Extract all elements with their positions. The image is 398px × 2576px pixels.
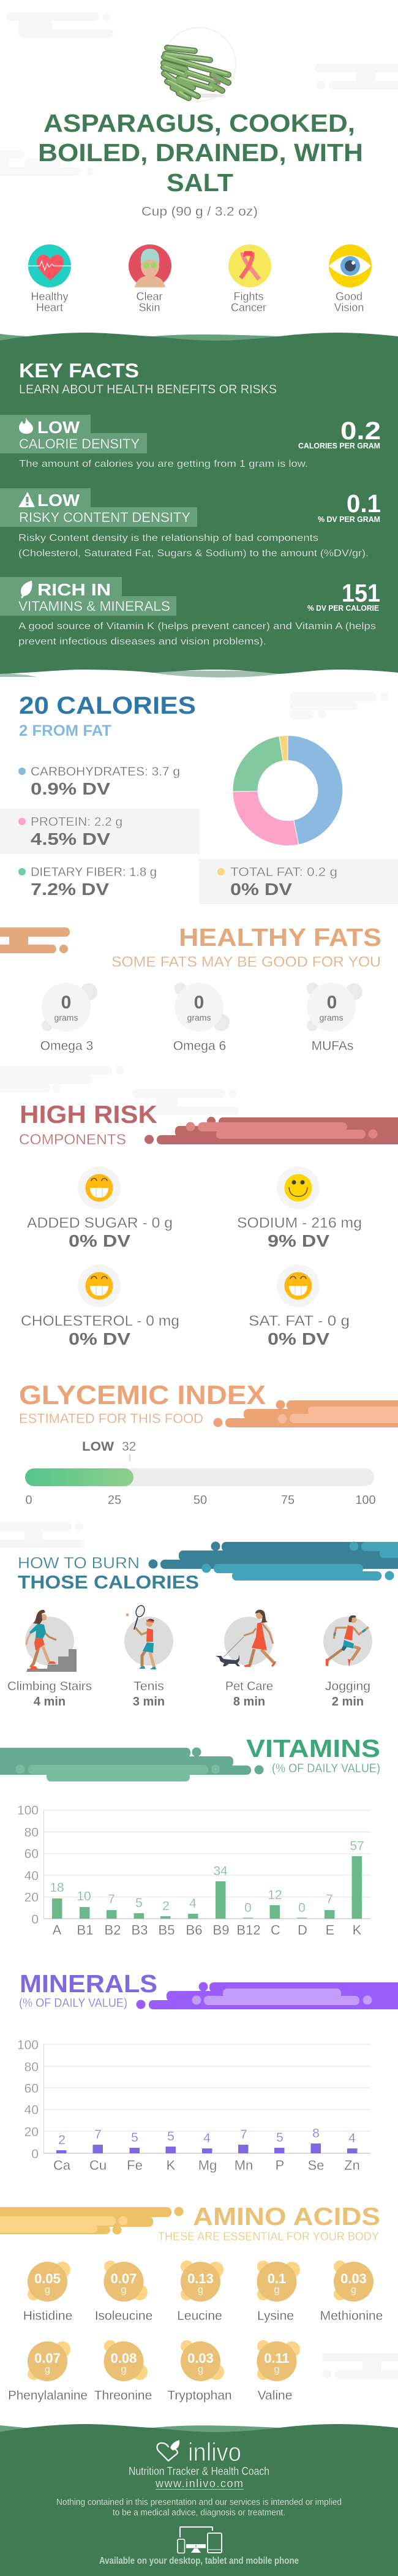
benefit: clear skin: Clear xyxy=(136,290,163,303)
nutrient: total fat: TOTAL FAT: 0.2 g xyxy=(230,866,337,879)
amino acid: methionine: 0.03 xyxy=(340,2271,367,2286)
heading: minerals: (% OF DAILY VALUE) xyxy=(19,1996,127,2010)
fact: rich in vitamins and minerals: 151 xyxy=(342,579,380,607)
amino acid: lysine: 0.1 xyxy=(268,2271,286,2286)
bar chart: minerals: Mg xyxy=(198,2158,217,2173)
bar chart: minerals: 40 xyxy=(24,2103,39,2117)
amino acid: histidine: g xyxy=(45,2284,50,2295)
bar chart: minerals: 5 xyxy=(276,2131,283,2145)
bar chart: minerals: Cu xyxy=(89,2158,107,2173)
nutrient: carbohydrates xyxy=(18,765,180,798)
bar chart: minerals xyxy=(17,2038,370,2173)
fat: omega 3: 0 xyxy=(61,992,71,1013)
bar chart: vitamins: 100 xyxy=(17,1804,39,1818)
disclaimer: to be a medical advice, diagnosis or treatment. xyxy=(113,2507,285,2518)
bar chart: vitamins: B9 xyxy=(213,1922,229,1938)
fat: omega 3: grams xyxy=(54,1013,78,1022)
bar chart: minerals: 20 xyxy=(24,2125,39,2139)
bar chart: vitamins: E xyxy=(326,1922,334,1938)
bar chart: vitamins: 4 xyxy=(189,1897,197,1911)
bar chart: vitamins: B1 xyxy=(77,1922,93,1938)
heading: vitamins xyxy=(246,1734,380,1775)
amino acid: threonine: 0.08 xyxy=(111,2351,137,2366)
fact: risky content density: LOW xyxy=(37,491,80,510)
tagline: Nutrition Tracker & Health Coach xyxy=(129,2465,269,2477)
fact: rich in vitamins and minerals: VITAMINS & MINERALS xyxy=(18,599,170,614)
heading: high risk: COMPONENTS xyxy=(19,1131,126,1148)
bar chart: vitamins: 5 xyxy=(135,1896,143,1910)
fact: risky content density: Risky Content density is the relationship of bad components xyxy=(18,533,318,543)
heading: how to burn those calories: HOW TO BURN xyxy=(18,1554,140,1572)
fact: calorie density: CALORIE DENSITY xyxy=(19,436,140,451)
heading: high risk: HIGH RISK xyxy=(20,1100,157,1128)
bar chart: vitamins: 7 xyxy=(108,1892,115,1906)
amino acid: leucine: g xyxy=(198,2284,203,2295)
panel: key facts xyxy=(0,333,398,678)
bar chart: minerals: 4 xyxy=(348,2131,356,2145)
amino acid: threonine xyxy=(94,2340,152,2403)
heading: how to burn those calories: THOSE CALORIES xyxy=(18,1571,199,1593)
amino acid: threonine: g xyxy=(121,2363,127,2375)
bar chart: minerals: Mn xyxy=(235,2158,253,2173)
decorative cloud: top right xyxy=(315,64,398,89)
amino acid: methionine: g xyxy=(351,2284,356,2295)
bar chart: vitamins: B2 xyxy=(105,1922,121,1938)
activity: pet care: Pet Care xyxy=(225,1680,273,1693)
bar chart: vitamins: D xyxy=(298,1922,307,1938)
glycemic index gauge: 75 xyxy=(281,1494,295,1507)
glycemic index gauge: 50 xyxy=(193,1494,207,1507)
amino acid: isoleucine: Isoleucine xyxy=(95,2309,152,2323)
bar chart: vitamins: 18 xyxy=(50,1881,64,1895)
title xyxy=(38,109,363,197)
bar chart: minerals: Ca xyxy=(53,2158,71,2173)
fat: omega 3 xyxy=(40,983,97,1053)
header graphic: minerals xyxy=(136,1982,398,2009)
bar chart: vitamins: 0 xyxy=(31,1913,39,1927)
benefit: fights cancer xyxy=(228,244,271,314)
bar chart: minerals: 7 xyxy=(240,2128,247,2142)
food photo: asparagus xyxy=(162,28,236,101)
bar chart: vitamins: 80 xyxy=(24,1826,39,1840)
bar chart: vitamins: A xyxy=(53,1922,62,1938)
amino acid: valine: Valine xyxy=(258,2389,292,2403)
bar chart: minerals: 5 xyxy=(131,2131,138,2145)
activity: tennis: Tenis xyxy=(133,1680,164,1693)
benefit: clear skin: Skin xyxy=(138,301,160,314)
serving size: Cup (90 g / 3.2 oz) xyxy=(141,205,258,219)
bar chart: vitamins: 20 xyxy=(24,1890,39,1905)
activity: pet care xyxy=(216,1610,276,1709)
fact: risky content density xyxy=(0,488,381,559)
risk: added sugar: 0% DV xyxy=(69,1231,130,1250)
bar chart: minerals: Se xyxy=(308,2158,324,2173)
amino acid: isoleucine xyxy=(95,2261,152,2323)
bar chart: vitamins: K xyxy=(353,1922,362,1938)
logo: inlivo: inlivo xyxy=(188,2438,241,2466)
heading: glycemic index: ESTIMATED FOR THIS FOOD xyxy=(19,1411,203,1426)
nutrient: protein xyxy=(0,809,200,854)
heading: healthy fats: HEALTHY FATS xyxy=(179,923,381,951)
heading: minerals: MINERALS xyxy=(20,1970,157,1998)
benefit: healthy heart xyxy=(28,244,71,314)
decorative cloud: behind title xyxy=(0,150,94,176)
nutrient: total fat xyxy=(199,859,398,904)
heading: healthy fats: SOME FATS MAY BE GOOD FOR YOU xyxy=(111,954,381,970)
bar chart: vitamins: 2 xyxy=(162,1899,170,1913)
glycemic index gauge: LOW xyxy=(82,1440,114,1454)
amino acid: methionine: Methionine xyxy=(320,2309,383,2323)
benefit: fights cancer: Fights xyxy=(233,290,264,303)
bar chart: minerals: 80 xyxy=(24,2060,39,2074)
decorative cloud: high risk right xyxy=(132,1089,239,1115)
bar chart: vitamins: C xyxy=(271,1922,280,1938)
glycemic index gauge: 32 xyxy=(122,1440,136,1454)
fact: rich in vitamins and minerals xyxy=(0,577,380,647)
bar chart: vitamins: 34 xyxy=(213,1864,228,1878)
amino acid: isoleucine: 0.07 xyxy=(111,2271,137,2286)
heading: minerals xyxy=(19,1970,157,2010)
bar chart: minerals: 7 xyxy=(94,2128,102,2142)
heading: vitamins: VITAMINS xyxy=(246,1734,380,1762)
fat: omega 6 xyxy=(173,983,230,1053)
heading: glycemic index xyxy=(19,1380,266,1426)
panel: footer xyxy=(0,2424,398,2576)
risk: saturated fat: SAT. FAT - 0 g xyxy=(249,1313,350,1329)
fact: rich in vitamins and minerals: % DV PER CALORIE xyxy=(307,604,379,613)
nutrient: dietary fiber: 7.2% DV xyxy=(31,880,109,899)
heading: amino acids xyxy=(158,2202,380,2243)
activity: jogging: 2 min xyxy=(332,1695,364,1709)
bar chart: vitamins: 40 xyxy=(24,1869,39,1883)
heading: glycemic index: GLYCEMIC INDEX xyxy=(19,1380,266,1410)
subheading: LEARN ABOUT HEALTH BENEFITS OR RISKS xyxy=(19,383,277,396)
benefit: good vision: Good xyxy=(336,290,362,303)
heading: vitamins: (% OF DAILY VALUE) xyxy=(272,1762,380,1775)
fact: risky content density: RISKY CONTENT DENSITY xyxy=(19,510,190,525)
nutrient: dietary fiber: DIETARY FIBER: 1.8 g xyxy=(31,866,157,879)
bar chart: minerals: 100 xyxy=(17,2038,39,2052)
decorative cloud: high risk left xyxy=(0,1066,124,1093)
fact: calorie density: CALORIES PER GRAM xyxy=(298,442,380,450)
fact: calorie density: The amount of calories you are getting from 1 gram is low. xyxy=(19,459,308,469)
bar chart: vitamins: B12 xyxy=(236,1922,261,1938)
bar chart: minerals: K xyxy=(167,2158,176,2173)
amino acid: lysine: g xyxy=(274,2284,280,2295)
bar chart: vitamins: 57 xyxy=(350,1839,364,1853)
amino acid: phenylalanine: 0.07 xyxy=(34,2351,61,2366)
risk: added sugar: ADDED SUGAR - 0 g xyxy=(27,1215,173,1231)
fat: MUFAs xyxy=(307,983,362,1053)
amino acid: phenylalanine: Phenylalanine xyxy=(8,2389,88,2403)
risk: saturated fat xyxy=(249,1264,350,1348)
activity: jogging xyxy=(323,1615,372,1709)
amino acid: tryptophan: 0.03 xyxy=(187,2351,214,2366)
nutrient: dietary fiber xyxy=(18,866,157,899)
amino acid: tryptophan xyxy=(167,2340,232,2403)
glycemic index gauge xyxy=(25,1440,376,1507)
availability note: Available on your desktop, tablet and mobile phone xyxy=(99,2556,299,2566)
nutrient: protein: PROTEIN: 2.2 g xyxy=(31,815,122,829)
bar chart: minerals: Zn xyxy=(344,2158,360,2173)
header graphic: glycemic index xyxy=(213,1400,398,1427)
amino acid: tryptophan: g xyxy=(198,2363,203,2375)
amino acid: leucine: Leucine xyxy=(177,2309,222,2323)
donut chart: macronutrients xyxy=(233,735,343,845)
fact: calorie density: LOW xyxy=(37,418,80,437)
bar chart: vitamins: 0 xyxy=(298,1901,306,1915)
decorative cloud: top left xyxy=(6,12,113,38)
bar chart: minerals: P xyxy=(276,2158,284,2173)
bar chart: vitamins: B3 xyxy=(132,1922,148,1938)
amino acid: valine: g xyxy=(274,2363,280,2375)
benefit: good vision xyxy=(329,244,372,314)
nutrient: carbohydrates: CARBOHYDRATES: 3.7 g xyxy=(31,765,180,779)
bar chart: vitamins: 12 xyxy=(268,1888,282,1902)
amino acid: lysine: Lysine xyxy=(257,2309,294,2323)
bar chart: minerals: 8 xyxy=(312,2126,320,2140)
amino acid: methionine xyxy=(320,2261,383,2323)
amino acid: leucine xyxy=(177,2261,223,2323)
amino acid: histidine: 0.05 xyxy=(34,2271,61,2286)
risk: cholesterol: 0% DV xyxy=(69,1329,130,1348)
amino acid: lysine xyxy=(257,2261,300,2323)
benefit: fights cancer: Cancer xyxy=(231,301,266,314)
activity: tennis xyxy=(124,1604,173,1709)
title: SALT xyxy=(167,168,233,197)
fact: calorie density xyxy=(0,415,381,469)
risk: sodium: SODIUM - 216 mg xyxy=(237,1215,362,1231)
header graphic: amino acids xyxy=(0,2207,184,2235)
disclaimer xyxy=(56,2497,342,2518)
decorative cloud: amino acids right xyxy=(321,2353,398,2379)
activity: climbing stairs: 4 min xyxy=(34,1695,66,1709)
icon: devices xyxy=(178,2527,222,2553)
decorative cloud: calories xyxy=(290,692,388,719)
glycemic index gauge: 100 xyxy=(355,1494,376,1507)
heading: key facts: KEY FACTS xyxy=(19,360,139,382)
amino acid: isoleucine: g xyxy=(121,2284,127,2295)
fact: rich in vitamins and minerals: RICH IN xyxy=(37,580,111,599)
benefit: healthy heart: Healthy xyxy=(31,290,69,303)
fat: MUFAs: 0 xyxy=(327,992,337,1013)
fact: risky content density: 0.1 xyxy=(347,489,381,518)
bar chart: vitamins: 0 xyxy=(244,1901,252,1915)
heading: healthy fats xyxy=(111,923,381,970)
heading: calories: 20 CALORIES xyxy=(19,692,196,719)
bar chart: minerals: 0 xyxy=(31,2147,39,2161)
amino acid: histidine: Histidine xyxy=(23,2309,72,2323)
amino acid: phenylalanine: g xyxy=(45,2363,50,2375)
bar chart: minerals: 5 xyxy=(167,2129,175,2144)
header graphic: burn calories xyxy=(148,1541,398,1581)
fat: omega 6: 0 xyxy=(194,992,204,1013)
bar chart: vitamins: 60 xyxy=(24,1847,39,1861)
amino acid: phenylalanine xyxy=(8,2341,88,2403)
heading: high risk xyxy=(19,1100,157,1148)
fact: rich in vitamins and minerals: A good source of Vitamin K (helps prevent cancer) and Vitamin A (helps xyxy=(18,621,376,632)
bar chart: vitamins: 10 xyxy=(77,1889,91,1903)
activity: pet care: 8 min xyxy=(233,1695,265,1709)
bar chart: minerals: Fe xyxy=(127,2158,143,2173)
amino acid: valine xyxy=(257,2340,300,2403)
heading: calories: 2 FROM FAT xyxy=(19,722,111,739)
activity: climbing stairs xyxy=(7,1610,92,1709)
amino acid: valine: 0.11 xyxy=(264,2351,290,2366)
bar chart: minerals: 2 xyxy=(58,2133,66,2147)
activity: tennis: 3 min xyxy=(133,1695,165,1709)
bar chart: vitamins: B5 xyxy=(159,1922,175,1938)
header graphic: vitamins xyxy=(0,1747,263,1781)
title: BOILED, DRAINED, WITH xyxy=(38,138,363,167)
heading: amino acids: THESE ARE ESSENTIAL FOR YOUR BODY xyxy=(158,2230,379,2243)
benefit: healthy heart: Heart xyxy=(36,301,63,314)
amino acid: tryptophan: Tryptophan xyxy=(167,2389,232,2403)
glycemic index gauge: 25 xyxy=(108,1494,121,1507)
nutrient: carbohydrates: 0.9% DV xyxy=(31,779,110,798)
glycemic index gauge: 0 xyxy=(25,1494,32,1507)
bar chart: vitamins: B6 xyxy=(186,1922,202,1938)
fat: omega 6: grams xyxy=(187,1013,211,1022)
risk: added sugar xyxy=(27,1166,173,1250)
heading: calories xyxy=(19,692,196,739)
website link: www.inlivo.com xyxy=(155,2477,243,2490)
fat: omega 6: Omega 6 xyxy=(173,1039,226,1053)
fat: MUFAs: MUFAs xyxy=(312,1039,353,1053)
fact: rich in vitamins and minerals: prevent infectious diseases and vision problems). xyxy=(18,636,266,647)
bar chart: vitamins xyxy=(17,1804,370,1938)
benefit: clear skin xyxy=(129,244,171,314)
amino acid: threonine: Threonine xyxy=(94,2389,152,2403)
logo: inlivo xyxy=(157,2438,241,2466)
nutrient: protein: 4.5% DV xyxy=(31,829,110,848)
amino acid: histidine xyxy=(23,2262,72,2323)
bar chart: minerals: 60 xyxy=(24,2082,39,2096)
nutrient: total fat: 0% DV xyxy=(230,880,292,899)
bar chart: vitamins: 7 xyxy=(326,1892,333,1906)
bar chart: minerals: 4 xyxy=(203,2131,211,2145)
header graphic: high risk xyxy=(145,1117,398,1144)
heading: amino acids: AMINO ACIDS xyxy=(193,2202,380,2230)
risk: sodium: 9% DV xyxy=(268,1231,329,1250)
header graphic: healthy fats xyxy=(0,927,70,953)
fat: MUFAs: grams xyxy=(320,1013,343,1022)
risk: cholesterol xyxy=(21,1264,179,1348)
amino acid: leucine: 0.13 xyxy=(187,2271,214,2286)
risk: saturated fat: 0% DV xyxy=(268,1329,329,1348)
decorative cloud: burn left xyxy=(0,1522,84,1548)
benefit: good vision: Vision xyxy=(334,301,364,314)
disclaimer: Nothing contained in this presentation and our services is intended or implied xyxy=(56,2497,342,2507)
fact: risky content density: (Cholesterol, Saturated Fat, Sugars & Sodium) to the amount (%DV/gr). xyxy=(18,548,369,559)
activity: climbing stairs: Climbing Stairs xyxy=(7,1680,92,1693)
fat: omega 3: Omega 3 xyxy=(40,1039,93,1053)
heading: how to burn those calories xyxy=(18,1554,199,1593)
activity: jogging: Jogging xyxy=(325,1680,370,1693)
risk: sodium xyxy=(237,1166,362,1250)
title: ASPARAGUS, COOKED, xyxy=(43,109,355,137)
fact: risky content density: % DV PER GRAM xyxy=(318,515,380,524)
risk: cholesterol: CHOLESTEROL - 0 mg xyxy=(21,1313,179,1329)
fact: calorie density: 0.2 xyxy=(340,417,381,445)
